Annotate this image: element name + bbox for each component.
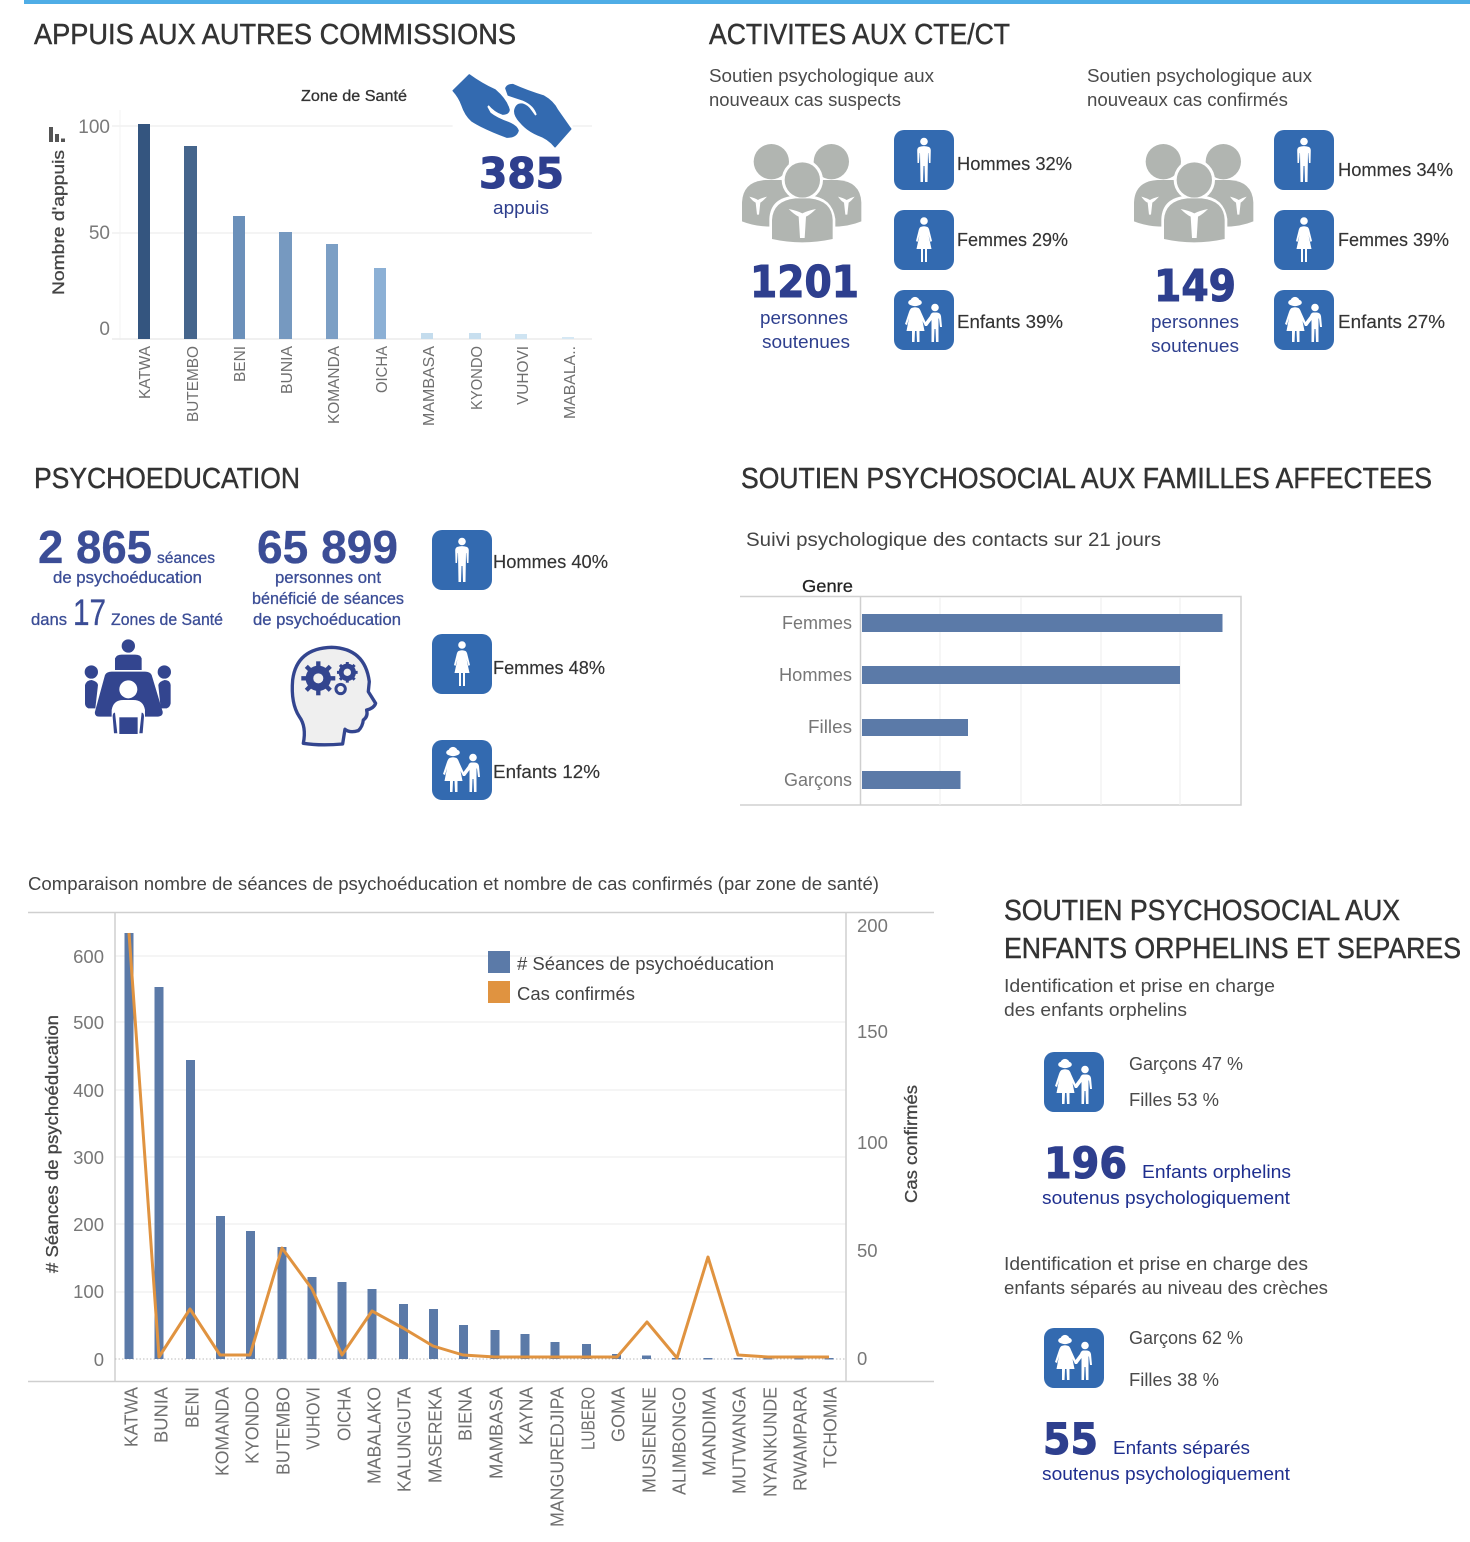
text: nouveaux cas confirmes: Soutien psychologique aux <box>1087 65 1313 86</box>
stat: 196 orphelins: soutenus psychologiquement <box>1042 1187 1290 1208</box>
chart: appuis par zone de sante: MAMBASA <box>421 346 438 426</box>
chart: appuis par zone de sante: 50 <box>89 223 110 244</box>
panel: appuis aux autres commissions <box>34 19 592 426</box>
label: enfants 39: Enfants 39% <box>957 311 1063 332</box>
stat: 55 separes <box>1042 1415 1290 1484</box>
panel: soutien aux familles <box>740 463 1432 805</box>
heading: psychoeducation: PSYCHOEDUCATION <box>34 463 300 495</box>
stat: 385 appuis: appuis <box>493 197 549 218</box>
stat: 65 899 personnes: personnes ont <box>275 568 381 587</box>
chart: combo bars and line: OICHA <box>334 1387 354 1441</box>
chart: appuis par zone de sante: KOMANDA <box>326 346 343 424</box>
chart: appuis par zone de sante <box>49 88 592 426</box>
chart: appuis par zone de sante: KYONDO <box>469 346 486 410</box>
chart: combo bars and line: MUTWANGA <box>730 1387 750 1494</box>
chart: combo bars and line: KYONDO <box>242 1387 262 1464</box>
chart: combo bars and line: # Séances de psychoéducation <box>42 1015 62 1273</box>
chart: genre bars <box>740 576 1241 805</box>
icon: woman <box>894 210 954 270</box>
chart: appuis par zone de sante: OICHA <box>374 346 391 393</box>
chart: combo bars and line: BIENA <box>456 1387 476 1441</box>
panel: enfants orphelins et separes <box>1004 895 1461 1484</box>
text: garcons filles orphelins: Filles 53 % <box>1129 1089 1219 1110</box>
chart title: Comparaison nombre de séances de psychoéducation et nombre de cas confirmés (par zone de santé) <box>28 874 879 894</box>
chart: appuis par zone de sante: MABALA.. <box>562 346 579 419</box>
heading: enfants <box>1004 895 1461 965</box>
top accent bar <box>24 0 1470 4</box>
stat: 385 appuis <box>479 149 564 218</box>
text: garcons filles separes: Garçons 62 % <box>1129 1327 1243 1348</box>
chart: combo bars and line: MAMBASA <box>486 1387 506 1479</box>
text: enfants separes intro: enfants séparés au niveau des crèches <box>1004 1277 1328 1298</box>
panel: psychoeducation <box>31 463 608 800</box>
stat: 55 separes: 55 <box>1043 1415 1098 1465</box>
stat: 65 899 personnes: de psychoéducation <box>253 610 401 629</box>
legend: Cas confirmés <box>517 983 635 1004</box>
stat: 2 865 seances: Zones de Santé <box>111 610 223 629</box>
stat: 55 separes: Enfants séparés <box>1113 1437 1250 1458</box>
chart: combo bars and line: MANDIMA <box>700 1387 720 1476</box>
chart: genre bars: Genre <box>802 576 853 596</box>
text: enfants orphelins intro: Identification et prise en charge <box>1004 975 1275 996</box>
chart: combo bars and line: 50 <box>857 1240 878 1261</box>
chart: combo bars and line: TCHOMIA <box>820 1387 840 1468</box>
stat: 196 orphelins: Enfants orphelins <box>1142 1161 1291 1182</box>
stat: 55 separes: soutenus psychologiquement <box>1042 1463 1290 1484</box>
stat: 385 appuis: 385 <box>479 149 564 198</box>
icon: children <box>1044 1328 1104 1388</box>
stat: 1201: personnes <box>760 307 848 328</box>
label: hommes 40: Hommes 40% <box>493 551 608 572</box>
text: garcons filles orphelins: Garçons 47 % <box>1129 1053 1243 1074</box>
text: nouveaux cas confirmes <box>1087 65 1313 110</box>
legend <box>488 951 774 1004</box>
chart: appuis par zone de sante: 100 <box>78 117 110 138</box>
icon: medical staff confirmes <box>1134 144 1253 244</box>
text: enfants separes intro: Identification et prise en charge des <box>1004 1253 1308 1274</box>
label: femmes 29: Femmes 29% <box>957 229 1068 250</box>
label: femmes 39: Femmes 39% <box>1338 229 1449 250</box>
icon: head with gears <box>292 647 376 745</box>
icon: man <box>1274 130 1334 190</box>
stat: 2 865 seances: 2 865 <box>38 521 152 573</box>
icon: children <box>432 740 492 800</box>
chart: combo bars and line: KATWA <box>122 1387 142 1447</box>
chart: combo bars and line: 100 <box>73 1281 104 1302</box>
label: hommes 34: Hommes 34% <box>1338 159 1453 180</box>
stat: 149 <box>1151 261 1239 356</box>
chart: combo bars and line: LUBERO <box>578 1387 598 1450</box>
icon: children <box>894 290 954 350</box>
stat: 2 865 seances <box>31 521 223 633</box>
label: enfants 27: Enfants 27% <box>1338 311 1445 332</box>
text: garcons filles separes: Filles 38 % <box>1129 1369 1219 1390</box>
label: enfants 12: Enfants 12% <box>493 761 600 782</box>
chart: combo bars and line: MASEREKA <box>426 1387 446 1483</box>
chart: combo bars and line: 400 <box>73 1080 104 1101</box>
icon: man <box>432 530 492 590</box>
chart: genre bars: Hommes <box>779 664 852 685</box>
chart: combo bars and line: VUHOVI <box>304 1387 324 1450</box>
chart: combo bars and line: GOMA <box>608 1387 628 1442</box>
chart: combo bars and line: MABALAKO <box>364 1387 384 1484</box>
stat: 196 orphelins <box>1042 1139 1291 1208</box>
chart: combo bars and line: 0 <box>94 1349 104 1370</box>
stat: 1201 <box>750 257 859 352</box>
chart: combo bars and line: 200 <box>73 1214 104 1235</box>
icon: hands <box>453 72 573 150</box>
stat: 65 899 personnes: 65 899 <box>257 521 398 573</box>
chart: combo bars and line: NYANKUNDE <box>760 1387 780 1497</box>
chart: combo bars and line: BENI <box>182 1387 202 1428</box>
chart: appuis par zone de sante: VUHOVI <box>515 346 532 405</box>
text: enfants orphelins intro: des enfants orphelins <box>1004 999 1187 1020</box>
chart: combo bars and line: BUTEMBO <box>274 1387 294 1475</box>
stat: 149: soutenues <box>1151 335 1239 356</box>
icon: woman <box>1274 210 1334 270</box>
text: nouveaux cas confirmes: nouveaux cas confirmés <box>1087 89 1288 110</box>
chart: appuis par zone de sante: KATWA <box>137 346 154 399</box>
stat: 2 865 seances: 17 <box>73 592 106 633</box>
stat: 2 865 seances: de psychoéducation <box>53 568 202 587</box>
stat: 65 899 personnes <box>252 521 404 629</box>
icon: children <box>1274 290 1334 350</box>
icon: children <box>1044 1052 1104 1112</box>
chart: combo bars and line: 200 <box>857 915 888 936</box>
icon: woman <box>432 634 492 694</box>
chart: combo bars and line: 500 <box>73 1012 104 1033</box>
chart: combo bars and line: BUNIA <box>152 1387 172 1443</box>
text: nouveaux cas suspects: Soutien psychologique aux <box>709 65 935 86</box>
chart: combo bars and line: 600 <box>73 946 104 967</box>
chart: combo bars and line: 0 <box>857 1348 867 1369</box>
label: hommes 32: Hommes 32% <box>957 153 1072 174</box>
chart: combo bars and line: 100 <box>857 1132 888 1153</box>
chart: combo bars and line: MANGUREDJIPA <box>548 1387 568 1527</box>
chart: combo bars and line: KAYNA <box>516 1387 536 1445</box>
heading: enfants: SOUTIEN PSYCHOSOCIAL AUX <box>1004 895 1400 927</box>
chart: appuis par zone de sante: 0 <box>99 319 110 340</box>
heading: appuis: APPUIS AUX AUTRES COMMISSIONS <box>34 19 516 51</box>
stat: 149: personnes <box>1151 311 1239 332</box>
chart: combo bars and line: MUSIENENE <box>640 1387 660 1493</box>
chart: genre bars: Garçons <box>784 769 852 790</box>
chart: combo bars and line: RWAMPARA <box>790 1387 810 1491</box>
chart: appuis par zone de sante: BUTEMBO <box>185 346 202 422</box>
heading: activites: ACTIVITES AUX CTE/CT <box>709 19 1010 51</box>
icon: man <box>894 130 954 190</box>
panel: activites aux CTE/CT <box>709 19 1453 356</box>
text: enfants orphelins intro <box>1004 975 1275 1020</box>
chart: combo bars and line: ALIMBONGO <box>670 1387 690 1495</box>
stat: 2 865 seances: dans <box>31 610 67 629</box>
chart: appuis par zone de sante: Nombre d'appuis <box>49 150 68 295</box>
label: femmes 48: Femmes 48% <box>493 657 605 678</box>
chart: combo bars and line: KALUNGUTA <box>394 1387 414 1492</box>
text: nouveaux cas suspects: nouveaux cas suspects <box>709 89 901 110</box>
text: garcons filles orphelins <box>1129 1053 1243 1110</box>
chart: combo bars and line: Cas confirmés <box>901 1085 921 1203</box>
stat: 1201: 1201 <box>750 257 859 308</box>
icon: meeting <box>85 639 171 734</box>
stat: 2 865 seances: séances <box>157 550 215 567</box>
legend: # Séances de psychoéducation <box>517 953 774 974</box>
chart: appuis par zone de sante: Zone de Santé <box>301 88 407 105</box>
chart: appuis par zone de sante: BUNIA <box>279 346 296 394</box>
panel: comparaison seances et cas confirmes <box>28 874 934 1527</box>
text: enfants separes intro <box>1004 1253 1328 1298</box>
chart: genre bars: Filles <box>808 716 852 737</box>
stat: 149: 149 <box>1154 261 1236 312</box>
chart: genre bars: Femmes <box>782 612 852 633</box>
chart: combo bars and line: KOMANDA <box>212 1387 232 1476</box>
stat: 196 orphelins: 196 <box>1044 1139 1127 1189</box>
chart: combo bars and line <box>28 912 934 1527</box>
chart: appuis par zone de sante: BENI <box>232 346 249 382</box>
chart: combo bars and line: 300 <box>73 1147 104 1168</box>
stat: 1201: soutenues <box>762 331 850 352</box>
text: suivi des contacts: Suivi psychologique des contacts sur 21 jours <box>746 529 1161 551</box>
text: nouveaux cas suspects <box>709 65 935 110</box>
stat: 65 899 personnes: bénéficié de séances <box>252 589 404 608</box>
icon: medical staff suspects <box>742 144 861 244</box>
chart: combo bars and line: 150 <box>857 1021 888 1042</box>
text: garcons filles separes <box>1129 1327 1243 1390</box>
